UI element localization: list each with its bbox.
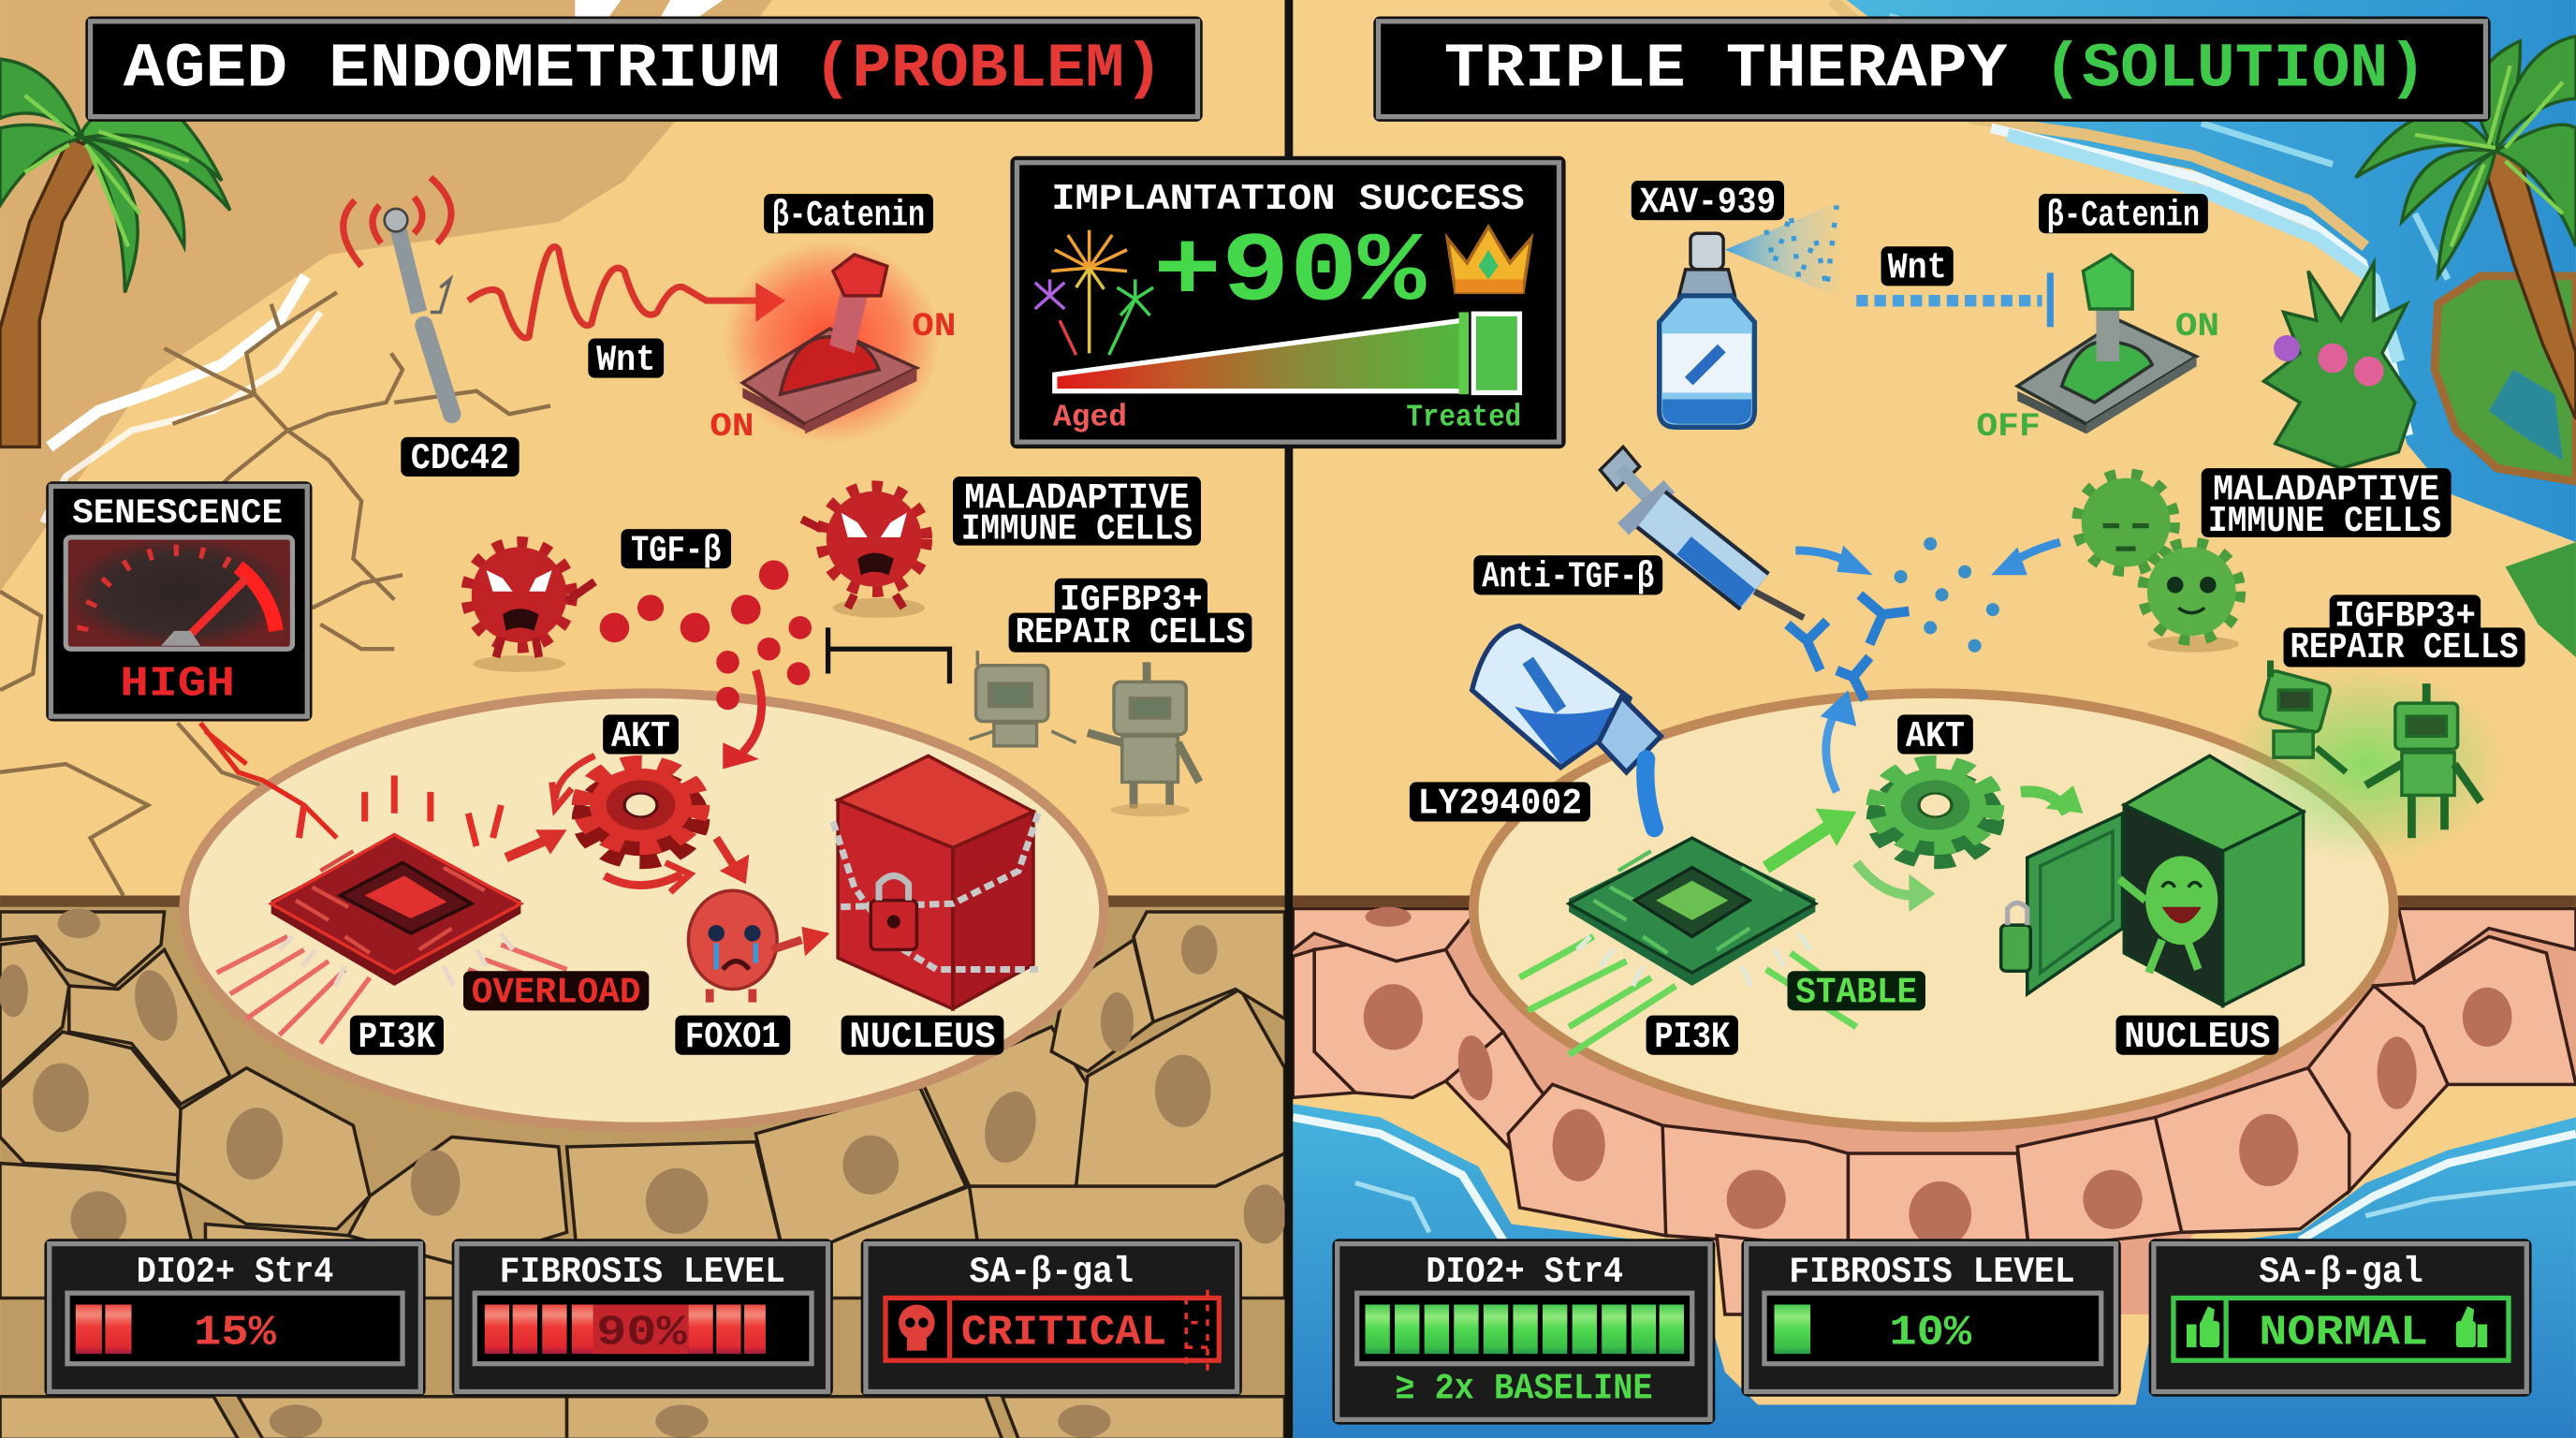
icon: green switch (2017, 255, 2197, 433)
icon: overloaded PI3K chip (200, 723, 567, 1043)
stat: SA-beta-gal right (2149, 1239, 2532, 1397)
label: repair cells left (1009, 579, 1251, 653)
stat: SA-beta-gal left (861, 1239, 1242, 1397)
arrows: blue neutralizing (1795, 542, 2060, 575)
title: left: (PROBLEM) (813, 34, 1164, 105)
heading: implantation success: IMPLANTATION SUCCESS (1051, 179, 1525, 220)
label: repair cells left: IGFBP3+ (1060, 580, 1203, 621)
label: treated: Treated (1406, 401, 1521, 436)
icon: angry immune cell 1 (470, 546, 594, 672)
arrow: red curve to AKT (723, 670, 762, 769)
stat: SA-beta-gal right: NORMAL (2259, 1309, 2428, 1357)
label: NUCLEUS left: NUCLEUS (849, 1017, 996, 1058)
heading: senescence: SENESCENCE (72, 494, 283, 534)
label: Wnt right: Wnt (1888, 248, 1947, 289)
stat: DIO2 left: DIO2+ Str4 (137, 1252, 333, 1293)
icon: antibodies (1788, 594, 1909, 700)
label: stable: STABLE (1795, 973, 1917, 1014)
TGF-beta particles (600, 560, 812, 710)
stat: fibrosis left: 90% (596, 1309, 687, 1357)
icon: XAV-939 spray bottle (1660, 200, 1843, 427)
background: left cracked earth (0, 292, 550, 895)
stat: DIO2 left (44, 1239, 426, 1397)
background: right healthy beach (1288, 0, 2576, 1438)
label: CDC42: CDC42 (411, 438, 509, 479)
stat: fibrosis left (452, 1239, 833, 1397)
icon: green gear (1876, 762, 1995, 862)
background: green island (2435, 276, 2576, 481)
icon: syringe (1600, 447, 1804, 618)
arrows: green pathway (1766, 785, 2083, 912)
label: AKT left: AKT (611, 716, 670, 757)
chart: success ramp (1055, 312, 1519, 394)
icon: angry immune cell 2 (802, 490, 925, 618)
background: left tissue cells (0, 903, 1286, 1438)
label: LY294002: LY294002 (1418, 784, 1582, 825)
title: left: AGED ENDOMETRIUM (124, 34, 781, 105)
icon: right-edge foliage (2505, 542, 2576, 657)
label: ON lower: ON (710, 408, 754, 446)
arrows: around gear (506, 756, 749, 892)
label: maladaptive immune cells right (2202, 468, 2452, 542)
label: overload: OVERLOAD (472, 973, 641, 1014)
label: repair cells right (2284, 594, 2525, 668)
label: repair cells right: IGFBP3+ (2334, 596, 2476, 638)
arrow: blue curve to AKT (1821, 690, 1856, 792)
label: maladaptive immune cells left: MALADAPTIVE (964, 477, 1190, 519)
icon: left palm tree (0, 59, 230, 447)
panel: senescence gauge (46, 481, 313, 721)
label: aged: Aged (1053, 401, 1127, 436)
stat: DIO2 right (1332, 1239, 1715, 1425)
stat: fibrosis right: FIBROSIS LEVEL (1789, 1252, 2075, 1293)
stat: fibrosis left: FIBROSIS LEVEL (500, 1252, 785, 1293)
icon: sad FOXO1 (688, 890, 829, 1003)
label: maladaptive immune cells right: IMMUNE CELLS (2208, 501, 2441, 542)
icon: broken CDC42 antenna (344, 178, 452, 414)
label: FOXO1: FOXO1 (685, 1017, 781, 1058)
background: left wet sand and foam (0, 0, 772, 592)
neutralized particles (1895, 537, 1999, 653)
label: repair cells left: REPAIR CELLS (1016, 612, 1245, 653)
icon: sleepy immune cell (2080, 477, 2172, 568)
stat: +90%: +90% (1153, 216, 1427, 329)
background: left dry beach (0, 0, 1288, 1438)
icon: crown (1447, 227, 1531, 292)
label: TGF-beta: TGF-β (631, 530, 722, 571)
stat: SA-beta-gal right: SA-β-gal (2259, 1252, 2423, 1293)
icon: locked red nucleus safe (833, 756, 1038, 1009)
label: Wnt: Wnt (596, 340, 655, 381)
icon: happy immune cell (2145, 546, 2239, 653)
label: PI3K left: PI3K (359, 1017, 436, 1058)
icon: tropical plant (2263, 263, 2563, 468)
background: right tissue cells (1293, 907, 2576, 1314)
icon: green robots (2226, 661, 2505, 862)
icon: right palm tree (2356, 37, 2576, 419)
label: XAV-939: XAV-939 (1640, 182, 1776, 223)
status: high: HIGH (120, 659, 235, 708)
icon: grey robots (970, 651, 1199, 816)
divider (1284, 0, 1293, 1438)
stat: DIO2 left: 15% (194, 1309, 277, 1357)
label: beta catenin right: β-Catenin (2047, 195, 2200, 236)
title: right: (SOLUTION) (2043, 34, 2426, 105)
gauge dial (66, 537, 292, 649)
label: ON right: ON (2175, 308, 2219, 345)
label: maladaptive immune cells right: MALADAPTIVE (2213, 470, 2439, 511)
icon: LY294002 tipped bottle (1472, 626, 1661, 829)
stat: fibrosis right (1741, 1239, 2121, 1397)
arrow: Wnt wave (468, 246, 785, 338)
stat: SA-beta-gal left: CRITICAL (961, 1309, 1166, 1357)
label: AKT right: AKT (1906, 716, 1965, 757)
stat: SA-beta-gal left: SA-β-gal (970, 1252, 1134, 1293)
label: maladaptive immune cells left: IMMUNE CELLS (961, 509, 1193, 550)
label: repair cells right: REPAIR CELLS (2291, 627, 2519, 668)
label: ON upper: ON (912, 308, 956, 345)
background: lower right sea (1293, 1104, 2576, 1438)
title: right (1373, 17, 2491, 122)
title: right: TRIPLE THERAPY (1444, 34, 2008, 105)
inhibition bar (828, 627, 949, 683)
label: beta catenin left: β-Catenin (772, 195, 925, 236)
background: upper right sea (1832, 0, 2576, 542)
label: PI3K right: PI3K (1654, 1017, 1731, 1058)
background: band above left cells (0, 895, 1284, 907)
background: band above right cells (1293, 895, 2576, 907)
icon: stable PI3K chip (1519, 838, 1856, 1055)
icon: red gear (581, 762, 700, 862)
panel: implantation success (1010, 156, 1566, 448)
membrane: right treated cell (1473, 694, 2393, 1127)
icon: red switch (723, 240, 940, 444)
membrane: left aged cell (184, 694, 1104, 1127)
label: OFF right: OFF (1976, 408, 2041, 446)
arrow: blocked Wnt (1856, 272, 2050, 327)
label: Anti-TGF-beta: Anti-TGF-β (1482, 557, 1654, 598)
label: NUCLEUS right: NUCLEUS (2124, 1017, 2271, 1058)
title: left (85, 17, 1203, 122)
icon: fireworks (1035, 230, 1153, 355)
stat: fibrosis right: 10% (1889, 1309, 1972, 1357)
icon: open green nucleus safe (2001, 756, 2304, 1005)
stat: DIO2 right: ≥ 2x BASELINE (1395, 1369, 1653, 1410)
label: maladaptive immune cells left (953, 477, 1201, 550)
stat: DIO2 right: DIO2+ Str4 (1426, 1252, 1623, 1293)
